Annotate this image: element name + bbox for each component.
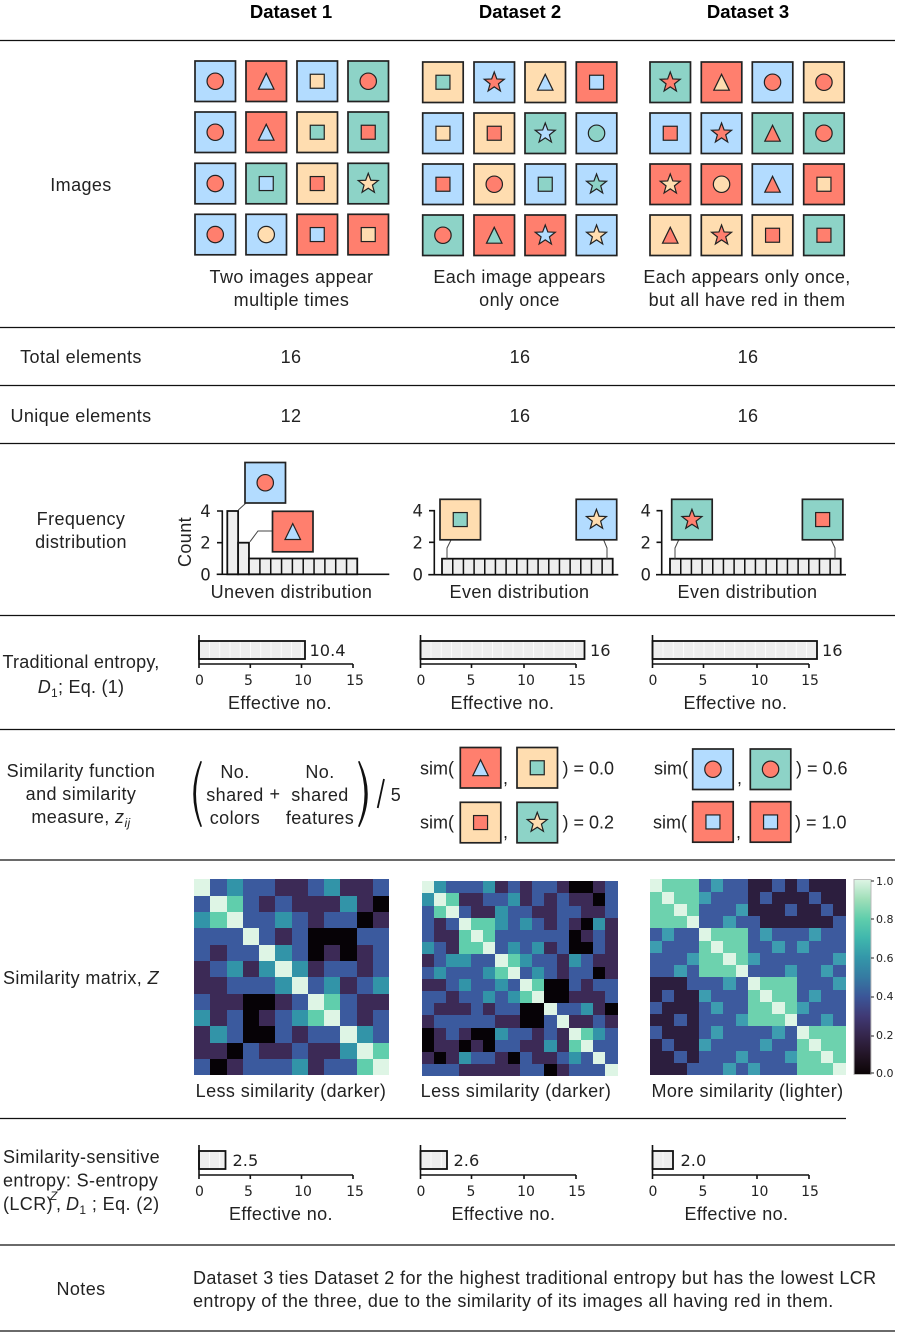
- heatmap: dataset 2 similarity matrix: [422, 881, 618, 1076]
- histogram: dataset 3: 0: [640, 566, 651, 585]
- icon: blue card with red circle: [245, 462, 286, 503]
- bar chart: S-entropy dataset 2: 0: [417, 1184, 425, 1200]
- bar chart: traditional entropy dataset 3: 16: [822, 641, 843, 660]
- notes text: Dataset 3 ties Dataset 2 for the highest traditional entropy but has the lowest LCR: [193, 1268, 877, 1288]
- caption: dataset 3 images: Each appears only once,: [643, 267, 851, 287]
- bar chart: traditional entropy dataset 1: Effective no.: [228, 693, 332, 713]
- row: total elements: Total elements: [20, 347, 142, 367]
- similarity examples: dataset 3: [653, 749, 848, 842]
- heading: Dataset 2: Dataset 2: [479, 1, 561, 22]
- histogram: dataset 3: 2: [640, 533, 651, 552]
- colorbar: 0.2: [876, 1029, 894, 1042]
- row: total elements: 16: [510, 347, 530, 367]
- similarity examples: dataset 2: ,: [503, 768, 508, 788]
- histogram: dataset 2: Even distribution: [450, 582, 589, 602]
- row label: similarity-sensitive entropy: Similarity-sensitive: [3, 1147, 160, 1167]
- image grid: dataset 1: [195, 61, 388, 255]
- similarity examples: dataset 3: sim(: [654, 758, 688, 778]
- heatmap: dataset 3 similarity matrix: [650, 879, 846, 1075]
- row label: similarity-sensitive entropy: 1: [79, 1203, 86, 1217]
- row label: similarity matrix: Similarity matrix, Z: [3, 968, 160, 988]
- bar chart: traditional entropy dataset 3: 10: [751, 673, 768, 689]
- row label: similarity function: ij: [124, 816, 131, 830]
- similarity examples: dataset 3: ) = 1.0: [795, 812, 847, 832]
- caption: dataset 3 matrix: More similarity (lighter): [651, 1081, 844, 1101]
- similarity examples: dataset 2: ,: [503, 822, 508, 842]
- similarity examples: dataset 3: ) = 0.6: [796, 758, 848, 778]
- colorbar: 0.0: [876, 1067, 894, 1080]
- caption: dataset 2 images: only once: [479, 290, 560, 310]
- histogram: dataset 1: Uneven distribution: [211, 582, 372, 602]
- bar chart: S-entropy dataset 2: 10: [517, 1184, 535, 1200]
- row label: frequency distribution: distribution: [35, 532, 127, 552]
- row label: similarity-sensitive entropy: entropy: S-entropy: [3, 1170, 158, 1190]
- colorbar: 0.8: [876, 913, 894, 926]
- row: unique elements: 16: [510, 406, 530, 426]
- bar chart: S-entropy dataset 1: 10: [294, 1184, 312, 1200]
- row label: notes: Notes: [56, 1279, 106, 1299]
- histogram: dataset 2: [412, 499, 618, 602]
- bar chart: S-entropy dataset 1: 0: [195, 1184, 204, 1200]
- histogram: dataset 1: [175, 462, 389, 602]
- heading: Dataset 3: Dataset 3: [707, 1, 789, 22]
- caption: dataset 3 images: but all have red in them: [649, 290, 845, 310]
- caption: dataset 2 matrix: Less similarity (darker): [421, 1081, 611, 1101]
- caption: dataset 1 images: multiple times: [234, 290, 349, 310]
- bar chart: S-entropy dataset 2: Effective no.: [452, 1204, 555, 1224]
- formula: similarity function: shared: [206, 785, 264, 805]
- similarity examples: dataset 2: sim(: [420, 812, 454, 832]
- bar chart: S-entropy dataset 3: 0: [649, 1184, 657, 1200]
- bar chart: S-entropy dataset 3: 2.0: [680, 1151, 706, 1170]
- histogram: dataset 3: 4: [640, 502, 651, 521]
- colorbar: [854, 875, 894, 1080]
- formula: similarity function: [193, 761, 401, 828]
- bar chart: S-entropy dataset 3: 5: [699, 1184, 707, 1200]
- bar chart: S-entropy dataset 2: 5: [467, 1184, 475, 1200]
- bar chart: traditional entropy dataset 3: 0: [649, 673, 657, 689]
- row: unique elements: 12: [281, 406, 301, 426]
- bar chart: traditional entropy dataset 1: [195, 635, 364, 713]
- bar chart: traditional entropy dataset 1: 0: [195, 673, 204, 689]
- bar chart: traditional entropy dataset 2: [417, 635, 611, 713]
- bar chart: S-entropy dataset 1: Effective no.: [229, 1204, 333, 1224]
- icon: blue card with cream star: [576, 499, 617, 540]
- colorbar: 0.4: [876, 990, 894, 1003]
- icon: cream card with teal square: [440, 499, 480, 540]
- row label: traditional entropy: ; Eq. (1): [58, 677, 124, 697]
- bar chart: traditional entropy dataset 2: 0: [417, 673, 425, 689]
- bar chart: traditional entropy dataset 3: 5: [699, 673, 707, 689]
- histogram: dataset 2: 4: [412, 502, 423, 521]
- bar chart: traditional entropy dataset 2: 15: [568, 673, 586, 689]
- icon: teal card with red square: [802, 499, 843, 540]
- heading: Dataset 1: Dataset 1: [250, 1, 332, 22]
- icon: red card with blue triangle: [272, 511, 313, 552]
- bar chart: S-entropy dataset 1: 2.5: [232, 1151, 258, 1170]
- bar chart: traditional entropy dataset 1: 10.4: [310, 641, 346, 660]
- bar chart: S-entropy dataset 1: [195, 1145, 364, 1224]
- bar chart: traditional entropy dataset 1: 10: [294, 673, 312, 689]
- row label: traditional entropy: 1: [51, 686, 58, 700]
- bar chart: S-entropy dataset 3: 10: [751, 1184, 768, 1200]
- histogram: dataset 3: Even distribution: [678, 582, 817, 602]
- colorbar: 0.6: [876, 952, 894, 965]
- formula: similarity function: shared: [291, 785, 349, 805]
- row: total elements: 16: [738, 347, 758, 367]
- row label: traditional entropy: D: [38, 677, 51, 697]
- colorbar: 1.0: [876, 875, 894, 888]
- heatmap: dataset 1 similarity matrix: [194, 879, 389, 1075]
- caption: dataset 1 matrix: Less similarity (darker): [196, 1081, 386, 1101]
- row label: similarity-sensitive entropy: Z: [49, 1189, 58, 1203]
- bar chart: S-entropy dataset 1: 5: [244, 1184, 253, 1200]
- histogram: dataset 1: 2: [200, 534, 211, 553]
- bar chart: traditional entropy dataset 2: 10: [517, 673, 535, 689]
- icon: teal card with red star: [672, 499, 712, 540]
- bar chart: traditional entropy dataset 2: 16: [590, 641, 611, 660]
- bar chart: S-entropy dataset 3: 15: [801, 1184, 819, 1200]
- caption: dataset 2 images: Each image appears: [433, 267, 606, 287]
- formula: similarity function: +: [270, 784, 280, 804]
- row label: similarity-sensitive entropy: D: [66, 1194, 79, 1214]
- bar chart: traditional entropy dataset 3: [649, 635, 843, 713]
- bar chart: traditional entropy dataset 3: 15: [801, 673, 819, 689]
- row: total elements: 16: [281, 347, 301, 367]
- similarity examples: dataset 2: ) = 0.0: [562, 758, 614, 778]
- row: total elements: [20, 347, 758, 367]
- formula: similarity function: features: [286, 808, 354, 828]
- image grid: dataset 3: [650, 62, 844, 256]
- row label: similarity function: Similarity function: [7, 761, 155, 781]
- bar chart: S-entropy dataset 2: 2.6: [454, 1151, 479, 1170]
- histogram: dataset 1: Count: [175, 517, 195, 567]
- similarity examples: dataset 2: ) = 0.2: [562, 812, 614, 832]
- row: unique elements: Unique elements: [10, 406, 152, 426]
- bar chart: S-entropy dataset 1: 15: [346, 1184, 364, 1200]
- notes text: entropy of the three, due to the similarity of its images all having red in them.: [193, 1291, 834, 1311]
- bar chart: S-entropy dataset 2: 15: [568, 1184, 586, 1200]
- image grid: dataset 2: [423, 62, 617, 256]
- bar chart: traditional entropy dataset 3: Effective no.: [684, 693, 787, 713]
- row: unique elements: 16: [738, 406, 758, 426]
- histogram: dataset 1: 4: [200, 502, 211, 521]
- formula: similarity function: No.: [220, 762, 250, 782]
- similarity examples: dataset 3: sim(: [653, 812, 687, 832]
- formula: similarity function: colors: [210, 808, 260, 828]
- row label: similarity function: z: [114, 807, 124, 827]
- histogram: dataset 1: 0: [200, 565, 211, 584]
- row label: similarity-sensitive entropy: ; Eq. (2): [86, 1194, 160, 1214]
- similarity examples: dataset 3: ,: [737, 768, 742, 788]
- row label: Images: Images: [50, 175, 112, 195]
- row label: frequency distribution: Frequency: [37, 509, 125, 529]
- bar chart: traditional entropy dataset 1: 15: [346, 673, 364, 689]
- bar chart: S-entropy dataset 3: [649, 1145, 819, 1224]
- histogram: dataset 3: [640, 499, 846, 602]
- row: unique elements: [10, 406, 758, 426]
- similarity examples: dataset 2: sim(: [420, 758, 454, 778]
- row label: similarity function: measure,: [31, 807, 115, 827]
- row label: similarity-sensitive entropy: (LCR): [3, 1194, 53, 1214]
- row label: traditional entropy: Traditional entropy,: [2, 652, 160, 672]
- row label: similarity function: and similarity: [26, 784, 136, 804]
- formula: similarity function: No.: [305, 762, 335, 782]
- formula: similarity function: 5: [391, 785, 401, 805]
- bar chart: S-entropy dataset 3: Effective no.: [685, 1204, 788, 1224]
- caption: dataset 1 images: Two images appear: [210, 267, 373, 287]
- bar chart: S-entropy dataset 2: [417, 1145, 586, 1224]
- bar chart: traditional entropy dataset 1: 5: [244, 673, 253, 689]
- similarity examples: dataset 3: ,: [736, 822, 741, 842]
- histogram: dataset 2: 0: [412, 566, 423, 585]
- histogram: dataset 2: 2: [412, 533, 423, 552]
- bar chart: traditional entropy dataset 2: 5: [467, 673, 475, 689]
- similarity examples: dataset 2: [420, 748, 614, 843]
- row label: similarity-sensitive entropy: ,: [56, 1194, 61, 1214]
- bar chart: traditional entropy dataset 2: Effective no.: [451, 693, 554, 713]
